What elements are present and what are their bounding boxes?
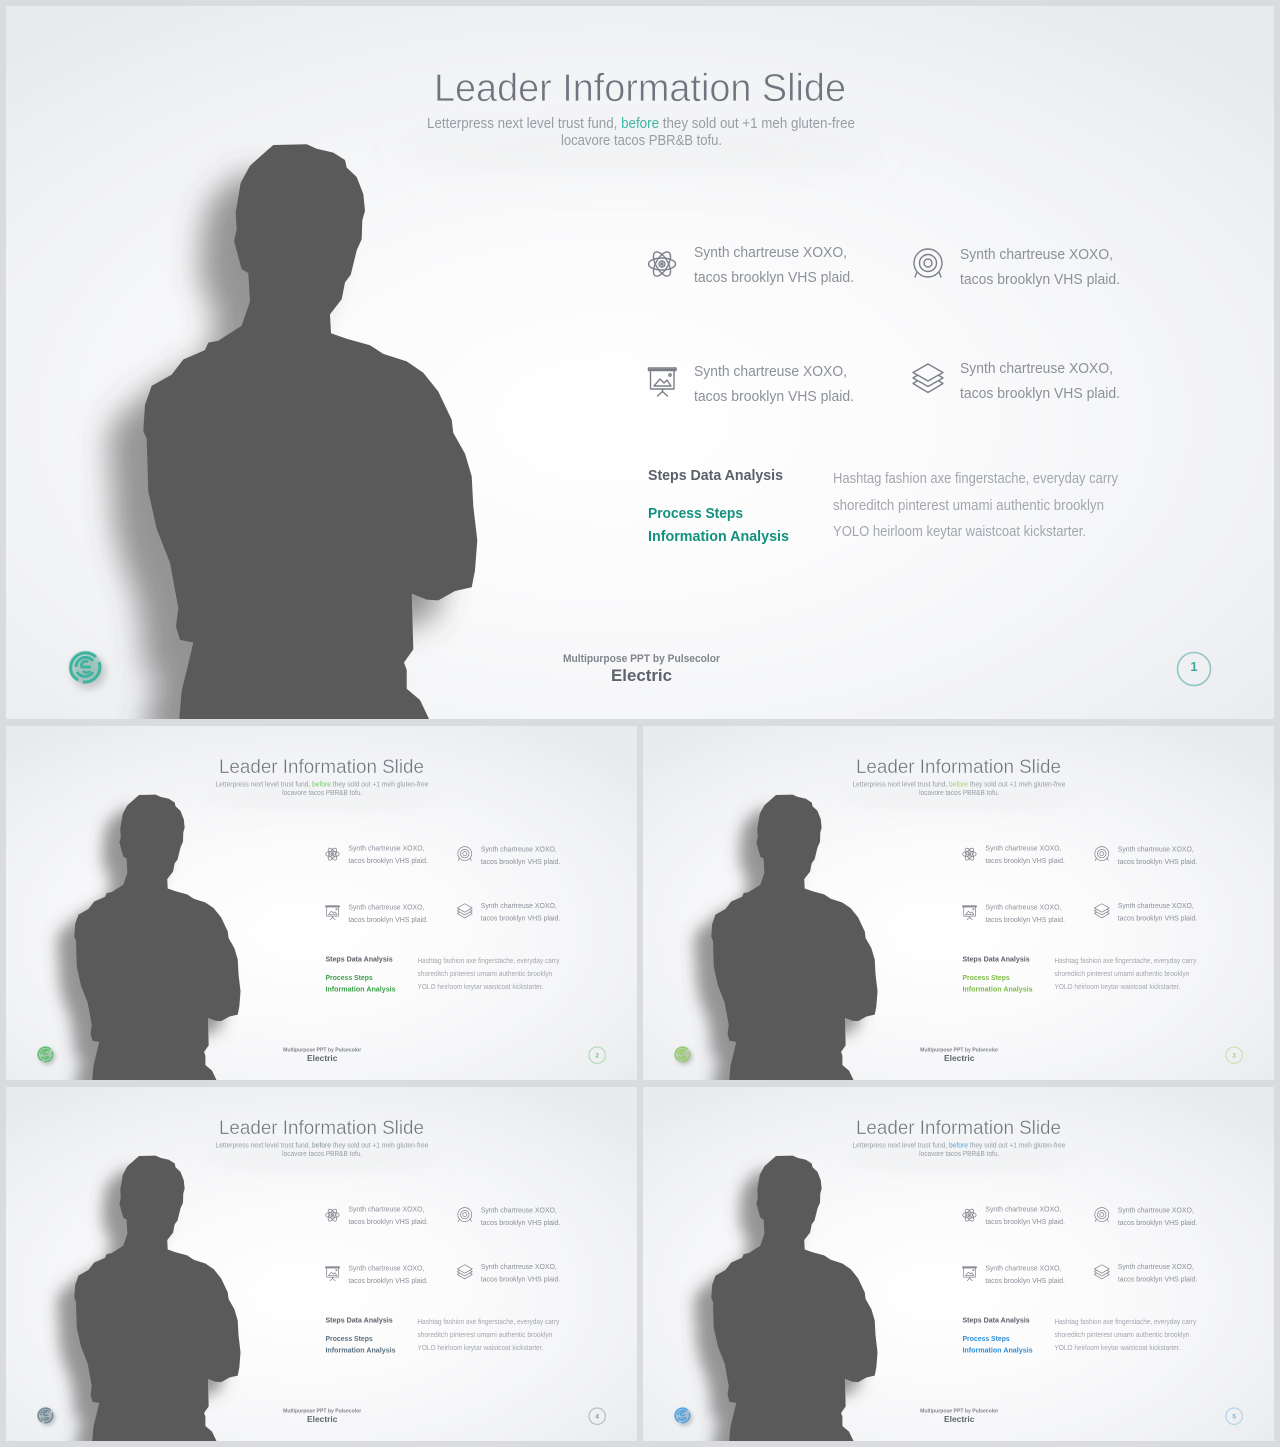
- icon: presentation board: [326, 1267, 339, 1281]
- icon: atom: [326, 847, 339, 861]
- feature text 2: Synth chartreuse XOXO,: [1118, 1206, 1194, 1215]
- paragraph: [1055, 1317, 1197, 1352]
- paragraph: Hashtag fashion axe fingerstache, everyday carry: [418, 956, 560, 965]
- process heading: Process Steps: [325, 973, 373, 982]
- feature text 4: tacos brooklyn VHS plaid.: [1118, 1275, 1197, 1284]
- feature text 3: [348, 1264, 428, 1285]
- feature text 4: [960, 360, 1120, 402]
- feature text 1: tacos brooklyn VHS plaid.: [348, 856, 428, 865]
- page number: [1226, 1408, 1242, 1424]
- subtitle: [216, 781, 428, 795]
- feature text 3: [694, 363, 854, 405]
- feature text 3: Synth chartreuse XOXO,: [694, 363, 847, 380]
- icon: layers: [1094, 1265, 1109, 1279]
- paragraph: YOLO heirloom keytar waistcoat kickstarter.: [1055, 1343, 1180, 1352]
- icon: presentation board: [963, 906, 976, 920]
- subtitle: locavore tacos PBR&B tofu.: [919, 788, 999, 797]
- page number: 4: [595, 1414, 599, 1421]
- footer text: Electric: [611, 667, 672, 685]
- feature text 2: tacos brooklyn VHS plaid.: [1118, 857, 1197, 866]
- title: Leader Information Slide: [856, 756, 1061, 778]
- steps heading: Steps Data Analysis: [648, 467, 783, 484]
- footer text: [283, 1048, 362, 1061]
- paragraph: Hashtag fashion axe fingerstache, everyday carry: [833, 471, 1119, 487]
- page number: [1226, 1047, 1242, 1063]
- process heading: [648, 508, 788, 544]
- icon: presentation board: [648, 368, 676, 396]
- paragraph: shoreditch pinterest umami authentic brooklyn: [418, 969, 552, 978]
- feature text 3: tacos brooklyn VHS plaid.: [348, 915, 428, 924]
- title: Leader Information Slide: [219, 756, 424, 778]
- process heading: [962, 973, 1033, 994]
- person silhouette with shadow: [57, 1156, 241, 1447]
- feature text 2: tacos brooklyn VHS plaid.: [1118, 1218, 1197, 1227]
- paragraph: YOLO heirloom keytar waistcoat kickstarter.: [833, 524, 1086, 540]
- page number: [589, 1047, 605, 1063]
- paragraph: [418, 956, 560, 991]
- footer text: Multipurpose PPT by Pulsecolor: [283, 1048, 362, 1054]
- feature text 1: Synth chartreuse XOXO,: [348, 844, 424, 853]
- feature text 1: [694, 244, 854, 286]
- page number: 3: [1232, 1053, 1236, 1060]
- footer text: Multipurpose PPT by Pulsecolor: [920, 1048, 999, 1054]
- footer text: [564, 654, 720, 681]
- panel: slide 3: [643, 726, 1274, 1095]
- feature text 4: Synth chartreuse XOXO,: [481, 901, 557, 910]
- process heading: Information Analysis: [648, 528, 789, 545]
- logo: [68, 650, 106, 689]
- icon: target: [458, 1208, 472, 1222]
- paragraph: shoreditch pinterest umami authentic brooklyn: [1055, 1330, 1189, 1339]
- feature text 4: [481, 1262, 560, 1284]
- feature text 3: Synth chartreuse XOXO,: [348, 903, 424, 912]
- feature text 4: Synth chartreuse XOXO,: [1118, 901, 1194, 910]
- paragraph: [418, 1317, 560, 1352]
- feature text 4: [1118, 901, 1197, 923]
- footer text: [283, 1409, 362, 1424]
- feature text 2: Synth chartreuse XOXO,: [960, 246, 1113, 263]
- feature text 1: Synth chartreuse XOXO,: [348, 1205, 424, 1214]
- subtitle: Letterpress next level trust fund, before they sold out +1 meh gluten-free: [215, 780, 428, 789]
- person silhouette with shadow: [108, 144, 477, 749]
- subtitle: Letterpress next level trust fund, before they sold out +1 meh gluten-free: [215, 1141, 428, 1150]
- icon: layers: [913, 364, 943, 392]
- icon: atom: [963, 847, 976, 861]
- process heading: Information Analysis: [962, 1346, 1033, 1355]
- paragraph: Hashtag fashion axe fingerstache, everyday carry: [1055, 956, 1197, 965]
- page number: [589, 1408, 605, 1424]
- feature text 2: [481, 1206, 560, 1227]
- icon: atom: [326, 1208, 339, 1222]
- paragraph: Hashtag fashion axe fingerstache, everyday carry: [1055, 1317, 1197, 1326]
- feature text 3: tacos brooklyn VHS plaid.: [348, 1276, 428, 1285]
- person silhouette with shadow: [694, 1156, 878, 1447]
- icon: atom: [648, 249, 676, 279]
- feature text 1: [348, 1205, 428, 1226]
- feature text 2: tacos brooklyn VHS plaid.: [481, 857, 560, 866]
- footer text: Electric: [944, 1054, 975, 1063]
- title: Leader Information Slide: [434, 67, 846, 110]
- subtitle: Letterpress next level trust fund, before they sold out +1 meh gluten-free: [852, 780, 1065, 789]
- logo: [674, 1046, 693, 1065]
- person silhouette with shadow: [694, 795, 878, 1095]
- paragraph: Hashtag fashion axe fingerstache, everyday carry: [418, 1317, 560, 1326]
- process heading: [962, 1334, 1033, 1355]
- paragraph: YOLO heirloom keytar waistcoat kickstarter.: [418, 1343, 543, 1352]
- feature text 2: [481, 845, 560, 866]
- subtitle: [428, 117, 854, 145]
- title: Leader Information Slide: [219, 1117, 424, 1139]
- feature text 2: Synth chartreuse XOXO,: [481, 1206, 557, 1215]
- feature text 1: Synth chartreuse XOXO,: [985, 844, 1061, 853]
- panel: main slide 1: [6, 6, 1274, 749]
- process heading: Process Steps: [325, 1334, 373, 1343]
- subtitle: [215, 1141, 428, 1158]
- process heading: Information Analysis: [962, 985, 1033, 994]
- icon: presentation board: [963, 1267, 976, 1281]
- feature text 4: tacos brooklyn VHS plaid.: [1118, 914, 1197, 923]
- feature text 3: Synth chartreuse XOXO,: [985, 903, 1061, 912]
- feature text 3: tacos brooklyn VHS plaid.: [694, 388, 854, 405]
- feature text 1: [985, 844, 1065, 865]
- paragraph: shoreditch pinterest umami authentic brooklyn: [1055, 969, 1189, 978]
- feature text 1: Synth chartreuse XOXO,: [694, 244, 847, 261]
- process heading: [325, 1334, 396, 1355]
- feature text 2: tacos brooklyn VHS plaid.: [481, 1218, 560, 1227]
- subtitle: locavore tacos PBR&B tofu.: [919, 1149, 999, 1158]
- feature text 4: [1118, 1262, 1197, 1284]
- feature text 1: tacos brooklyn VHS plaid.: [985, 856, 1065, 865]
- footer text: Electric: [307, 1415, 338, 1424]
- feature text 2: [1118, 1206, 1197, 1227]
- subtitle: [852, 1141, 1065, 1158]
- icon: layers: [457, 904, 472, 918]
- page number: 1: [1190, 659, 1198, 674]
- panel: slide 2: [6, 726, 637, 1095]
- steps heading: Steps Data Analysis: [325, 954, 393, 963]
- feature text 2: Synth chartreuse XOXO,: [481, 845, 557, 854]
- page number: 2: [595, 1053, 599, 1060]
- process heading: Process Steps: [648, 505, 743, 522]
- subtitle: locavore tacos PBR&B tofu.: [282, 788, 362, 797]
- process heading: Process Steps: [962, 1334, 1010, 1343]
- process heading: Process Steps: [962, 973, 1010, 982]
- footer text: Electric: [944, 1415, 975, 1424]
- paragraph: shoreditch pinterest umami authentic brooklyn: [833, 498, 1104, 514]
- feature text 3: Synth chartreuse XOXO,: [985, 1264, 1061, 1273]
- footer text: [920, 1409, 999, 1424]
- feature text 2: tacos brooklyn VHS plaid.: [960, 271, 1120, 288]
- paragraph: [1055, 956, 1197, 991]
- feature text 3: tacos brooklyn VHS plaid.: [985, 1276, 1065, 1285]
- icon: layers: [1094, 904, 1109, 918]
- person silhouette with shadow: [57, 795, 241, 1095]
- icon: target: [1095, 847, 1109, 861]
- icon: target: [458, 847, 472, 861]
- logo: [37, 1407, 56, 1426]
- feature text 4: Synth chartreuse XOXO,: [960, 360, 1113, 377]
- feature text 1: tacos brooklyn VHS plaid.: [985, 1217, 1065, 1226]
- feature text 4: tacos brooklyn VHS plaid.: [481, 1275, 560, 1284]
- logo: [37, 1046, 56, 1065]
- feature text 1: tacos brooklyn VHS plaid.: [348, 1217, 428, 1226]
- paragraph: [833, 471, 1119, 540]
- feature text 4: tacos brooklyn VHS plaid.: [960, 385, 1120, 402]
- subtitle: locavore tacos PBR&B tofu.: [282, 1149, 362, 1158]
- subtitle: Letterpress next level trust fund, before they sold out +1 meh gluten-free: [852, 1141, 1065, 1150]
- title: Leader Information Slide: [856, 1117, 1061, 1139]
- feature text 2: [1118, 845, 1197, 866]
- feature text 4: tacos brooklyn VHS plaid.: [481, 914, 560, 923]
- process heading: Information Analysis: [325, 985, 396, 994]
- panel: slide 5: [643, 1087, 1274, 1447]
- feature text 2: Synth chartreuse XOXO,: [1118, 845, 1194, 854]
- process heading: [326, 975, 396, 993]
- icon: layers: [457, 1265, 472, 1279]
- icon: atom: [963, 1208, 976, 1222]
- feature text 3: [985, 1264, 1065, 1285]
- steps heading: Steps Data Analysis: [962, 954, 1030, 963]
- feature text 1: [348, 844, 428, 865]
- feature text 4: Synth chartreuse XOXO,: [481, 1262, 557, 1271]
- feature text 2: [960, 246, 1120, 288]
- footer text: Multipurpose PPT by Pulsecolor: [283, 1409, 362, 1415]
- feature text 3: Synth chartreuse XOXO,: [348, 1264, 424, 1273]
- icon: presentation board: [326, 906, 339, 920]
- panel: slide 4: [6, 1087, 637, 1447]
- page number: [1178, 652, 1210, 686]
- footer text: Multipurpose PPT by Pulsecolor: [563, 653, 721, 665]
- subtitle: Letterpress next level trust fund, before they sold out +1 meh gluten-free: [427, 116, 855, 132]
- icon: target: [1095, 1208, 1109, 1222]
- icon: target: [914, 249, 942, 277]
- steps heading: Steps Data Analysis: [962, 1315, 1030, 1324]
- feature text 3: tacos brooklyn VHS plaid.: [985, 915, 1065, 924]
- feature text 4: [481, 901, 560, 923]
- feature text 1: tacos brooklyn VHS plaid.: [694, 269, 854, 286]
- steps heading: Steps Data Analysis: [325, 1315, 393, 1324]
- logo: [674, 1407, 693, 1426]
- footer text: Multipurpose PPT by Pulsecolor: [920, 1409, 999, 1415]
- feature text 1: [985, 1205, 1065, 1226]
- paragraph: shoreditch pinterest umami authentic brooklyn: [418, 1330, 552, 1339]
- process heading: Information Analysis: [325, 1346, 396, 1355]
- feature text 3: [985, 903, 1065, 924]
- paragraph: YOLO heirloom keytar waistcoat kickstarter.: [418, 982, 543, 991]
- footer text: Electric: [307, 1054, 338, 1063]
- subtitle: locavore tacos PBR&B tofu.: [561, 133, 722, 149]
- footer text: [920, 1048, 999, 1063]
- feature text 3: [348, 903, 428, 924]
- page number: 5: [1232, 1414, 1236, 1421]
- paragraph: YOLO heirloom keytar waistcoat kickstarter.: [1055, 982, 1180, 991]
- subtitle: [853, 781, 1066, 795]
- feature text 4: Synth chartreuse XOXO,: [1118, 1262, 1194, 1271]
- feature text 1: Synth chartreuse XOXO,: [985, 1205, 1061, 1214]
